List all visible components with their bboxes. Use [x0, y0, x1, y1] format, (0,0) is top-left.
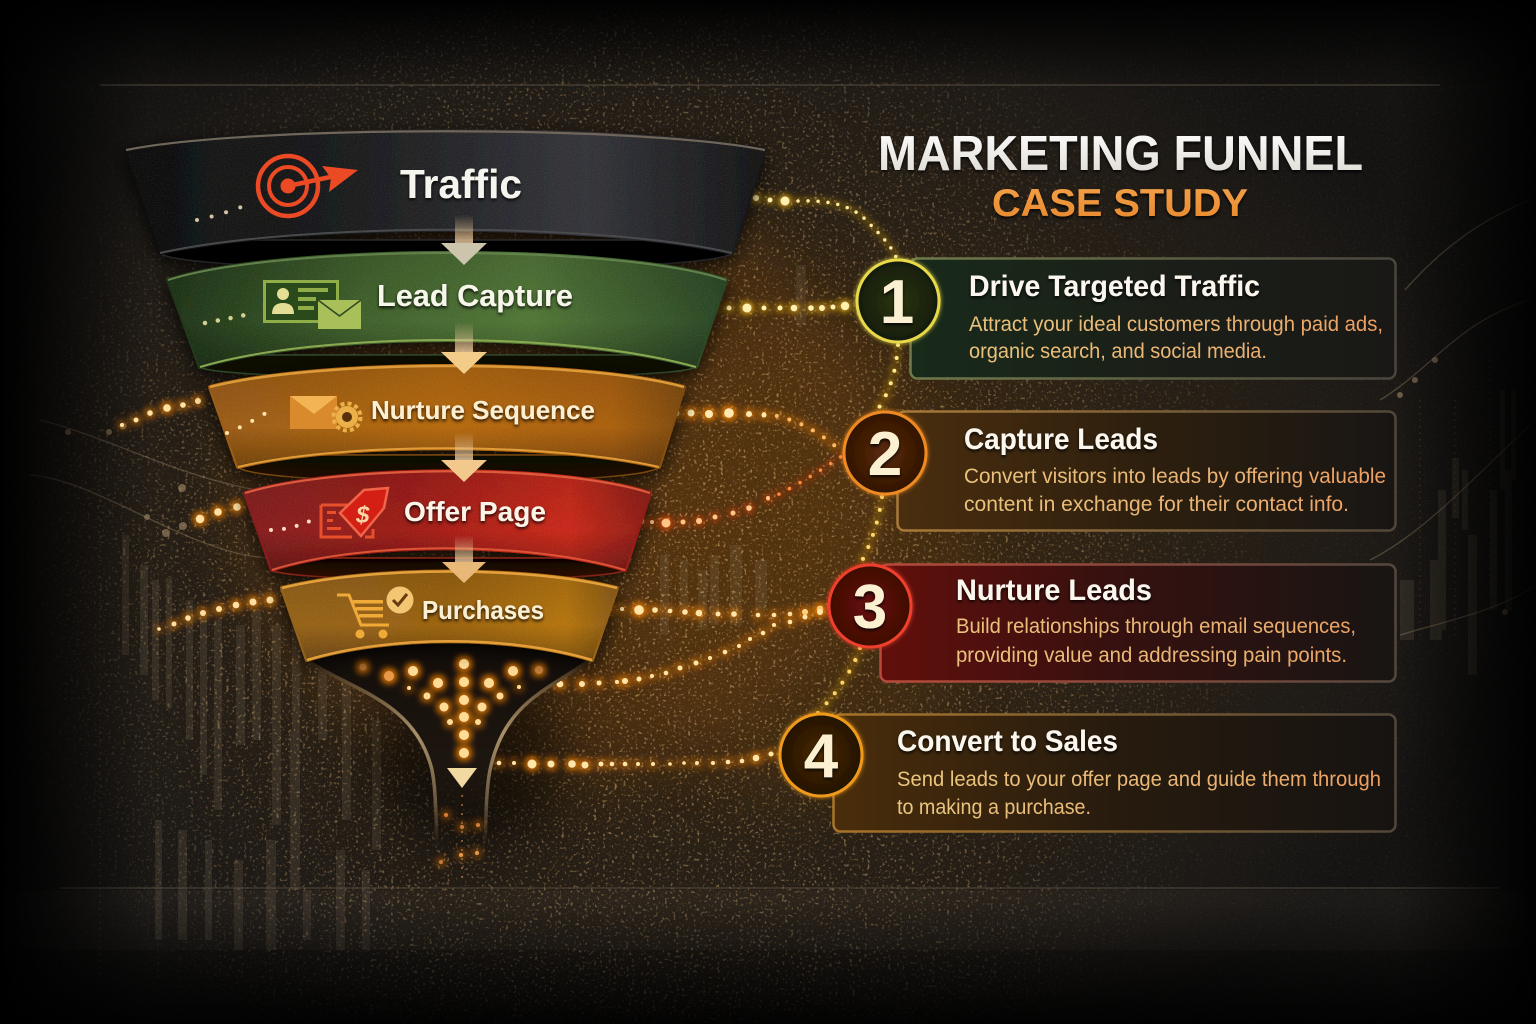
spout glowing dots	[360, 659, 543, 864]
connector dots: purchases right stream	[606, 605, 823, 617]
funnel layer: offer page	[245, 471, 650, 580]
icon: offer tag	[321, 488, 388, 537]
funnel layer: purchases	[282, 572, 617, 660]
title	[878, 127, 1363, 225]
panel: step 4 convert to sales: Convert to Sales	[897, 725, 1118, 758]
connector dots: bottom right stream	[497, 752, 774, 768]
panel: step 3 nurture leads: Build relationships through email sequences,	[956, 615, 1356, 638]
icon: target with arrow	[258, 156, 358, 216]
panel: step 1 drive targeted traffic: organic search, and social media.	[969, 340, 1267, 363]
funnel layer: nurture sequence	[210, 366, 684, 482]
label: traffic: Traffic	[400, 161, 522, 207]
connector dots: lead capture stream	[710, 302, 849, 312]
inner dots on bands	[197, 205, 310, 530]
label: lead capture: Lead Capture	[377, 278, 573, 313]
icon: contact card and envelope	[264, 282, 361, 329]
badge: number 2	[844, 412, 926, 494]
funnel band grain	[120, 125, 770, 665]
badge: number 3: 3	[853, 573, 887, 642]
panel: step 2 capture leads: content in exchange for their contact info.	[964, 493, 1349, 516]
connector dots: nurture left stream	[120, 398, 201, 427]
panel: step 4 convert to sales: to making a purchase.	[897, 796, 1091, 819]
badge: number 4: 4	[804, 722, 839, 791]
arrow: offer to purchases	[442, 535, 486, 583]
panel: step 3 nurture leads: Nurture Leads	[956, 574, 1152, 607]
panel: step 3 nurture leads	[829, 564, 1396, 682]
panel: step 1 drive targeted traffic: Drive Targeted Traffic	[969, 270, 1260, 303]
connector dots: traffic stream	[753, 195, 898, 262]
panel: step 2 capture leads	[844, 412, 1396, 530]
funnel spout	[307, 640, 592, 880]
title: MARKETING FUNNEL	[878, 127, 1363, 181]
label: nurture sequence: Nurture Sequence	[371, 395, 595, 425]
badge: number 1	[857, 260, 939, 342]
panel: step 2 capture leads: Convert visitors into leads by offering valuable	[964, 465, 1386, 488]
panel: step 3 nurture leads: providing value and addressing pain points.	[956, 644, 1347, 667]
panel: step 4 convert to sales	[780, 714, 1396, 832]
icon: envelope and gear	[290, 396, 360, 430]
connector dots: offer left stream	[196, 503, 241, 523]
connector dots: vertical chain	[816, 345, 898, 715]
connector dots: nurture right stream	[672, 408, 842, 452]
connector dots: offer right stream	[638, 456, 842, 528]
icon: shopping cart with check	[337, 586, 414, 638]
label: offer page: Offer Page	[404, 496, 546, 527]
label: purchases: Purchases	[422, 595, 544, 625]
funnel	[120, 125, 770, 880]
badge: number 1: 1	[880, 268, 914, 337]
panel: step 2 capture leads: Capture Leads	[964, 423, 1158, 456]
spout arrowhead	[447, 768, 477, 788]
panel: step 1 drive targeted traffic	[857, 258, 1396, 378]
arrow: lead capture to nurture	[441, 322, 487, 374]
panel: step 4 convert to sales: Send leads to your offer page and guide them through	[897, 768, 1381, 791]
badge: number 3	[829, 565, 911, 647]
arrow: traffic to lead capture	[441, 215, 487, 265]
funnel layer: lead capture	[168, 253, 726, 378]
connector dots: purchases left stream	[157, 596, 274, 631]
panel: step 1 drive targeted traffic: Attract your ideal customers through paid ads,	[969, 313, 1383, 336]
badge: number 2: 2	[868, 420, 902, 489]
connector dots: spout right stream	[557, 609, 823, 687]
icon: offer tag: $	[355, 502, 370, 529]
arrow: nurture to offer	[441, 432, 487, 482]
funnel layer: traffic	[126, 131, 765, 270]
subtitle: CASE STUDY	[992, 182, 1248, 225]
badge: number 4	[780, 714, 862, 796]
